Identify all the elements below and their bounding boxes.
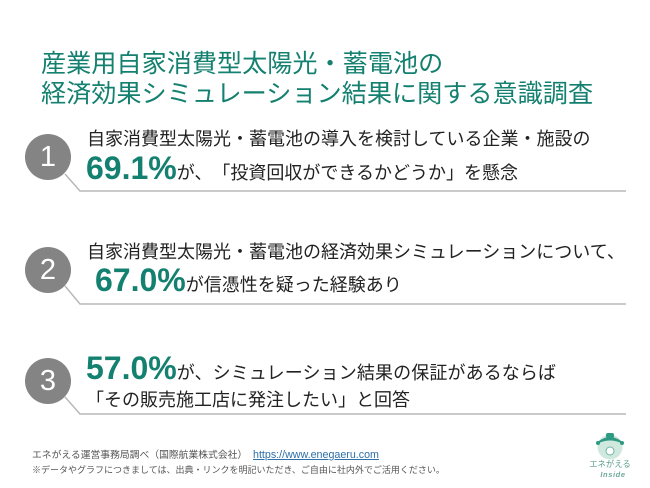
title: 産業用自家消費型太陽光・蓄電池の <box>41 50 443 78</box>
number badge 2 <box>25 247 71 293</box>
panel: finding 2 <box>25 242 625 298</box>
footer source: エネがえる運営事務局調べ（国際航業株式会社） <box>32 450 247 461</box>
finding 1 statistic: 69.1%が、「投資回収ができるかどうか」を懸念 <box>86 150 518 186</box>
number badge 3: 3 <box>40 365 56 397</box>
finding 3 text: 「その販売施工店に発注したい」と回答 <box>86 390 410 410</box>
title <box>41 50 593 108</box>
finding 2 text: 自家消費型太陽光・蓄電池の経済効果シミュレーションについて、 <box>87 242 625 262</box>
title: 経済効果シミュレーション結果に関する意識調査 <box>41 80 593 108</box>
footer source: https://www.enegaeru.com <box>253 449 379 461</box>
footer source <box>32 449 445 475</box>
finding 1 text: 自家消費型太陽光・蓄電池の導入を検討している企業・施設の <box>87 129 590 149</box>
number badge 1 <box>25 134 71 180</box>
number badge 3 <box>25 358 71 404</box>
finding 2 statistic: 67.0%が信憑性を疑った経験あり <box>95 262 402 298</box>
footer source: ※データやグラフにつきましては、出典・リンクを明記いただき、ご自由に社内外でご活用ください。 <box>32 465 445 475</box>
number badge 2: 2 <box>40 254 56 286</box>
icon: logo <box>589 433 631 479</box>
panel: finding 1 <box>25 129 590 186</box>
icon: logo: Inside <box>600 470 626 479</box>
number badge 1: 1 <box>40 140 56 172</box>
panel: finding 3 <box>25 350 556 410</box>
finding 3 statistic: 57.0%が、シミュレーション結果の保証があるならば <box>86 350 556 386</box>
icon: logo: エネがえる <box>589 459 631 469</box>
